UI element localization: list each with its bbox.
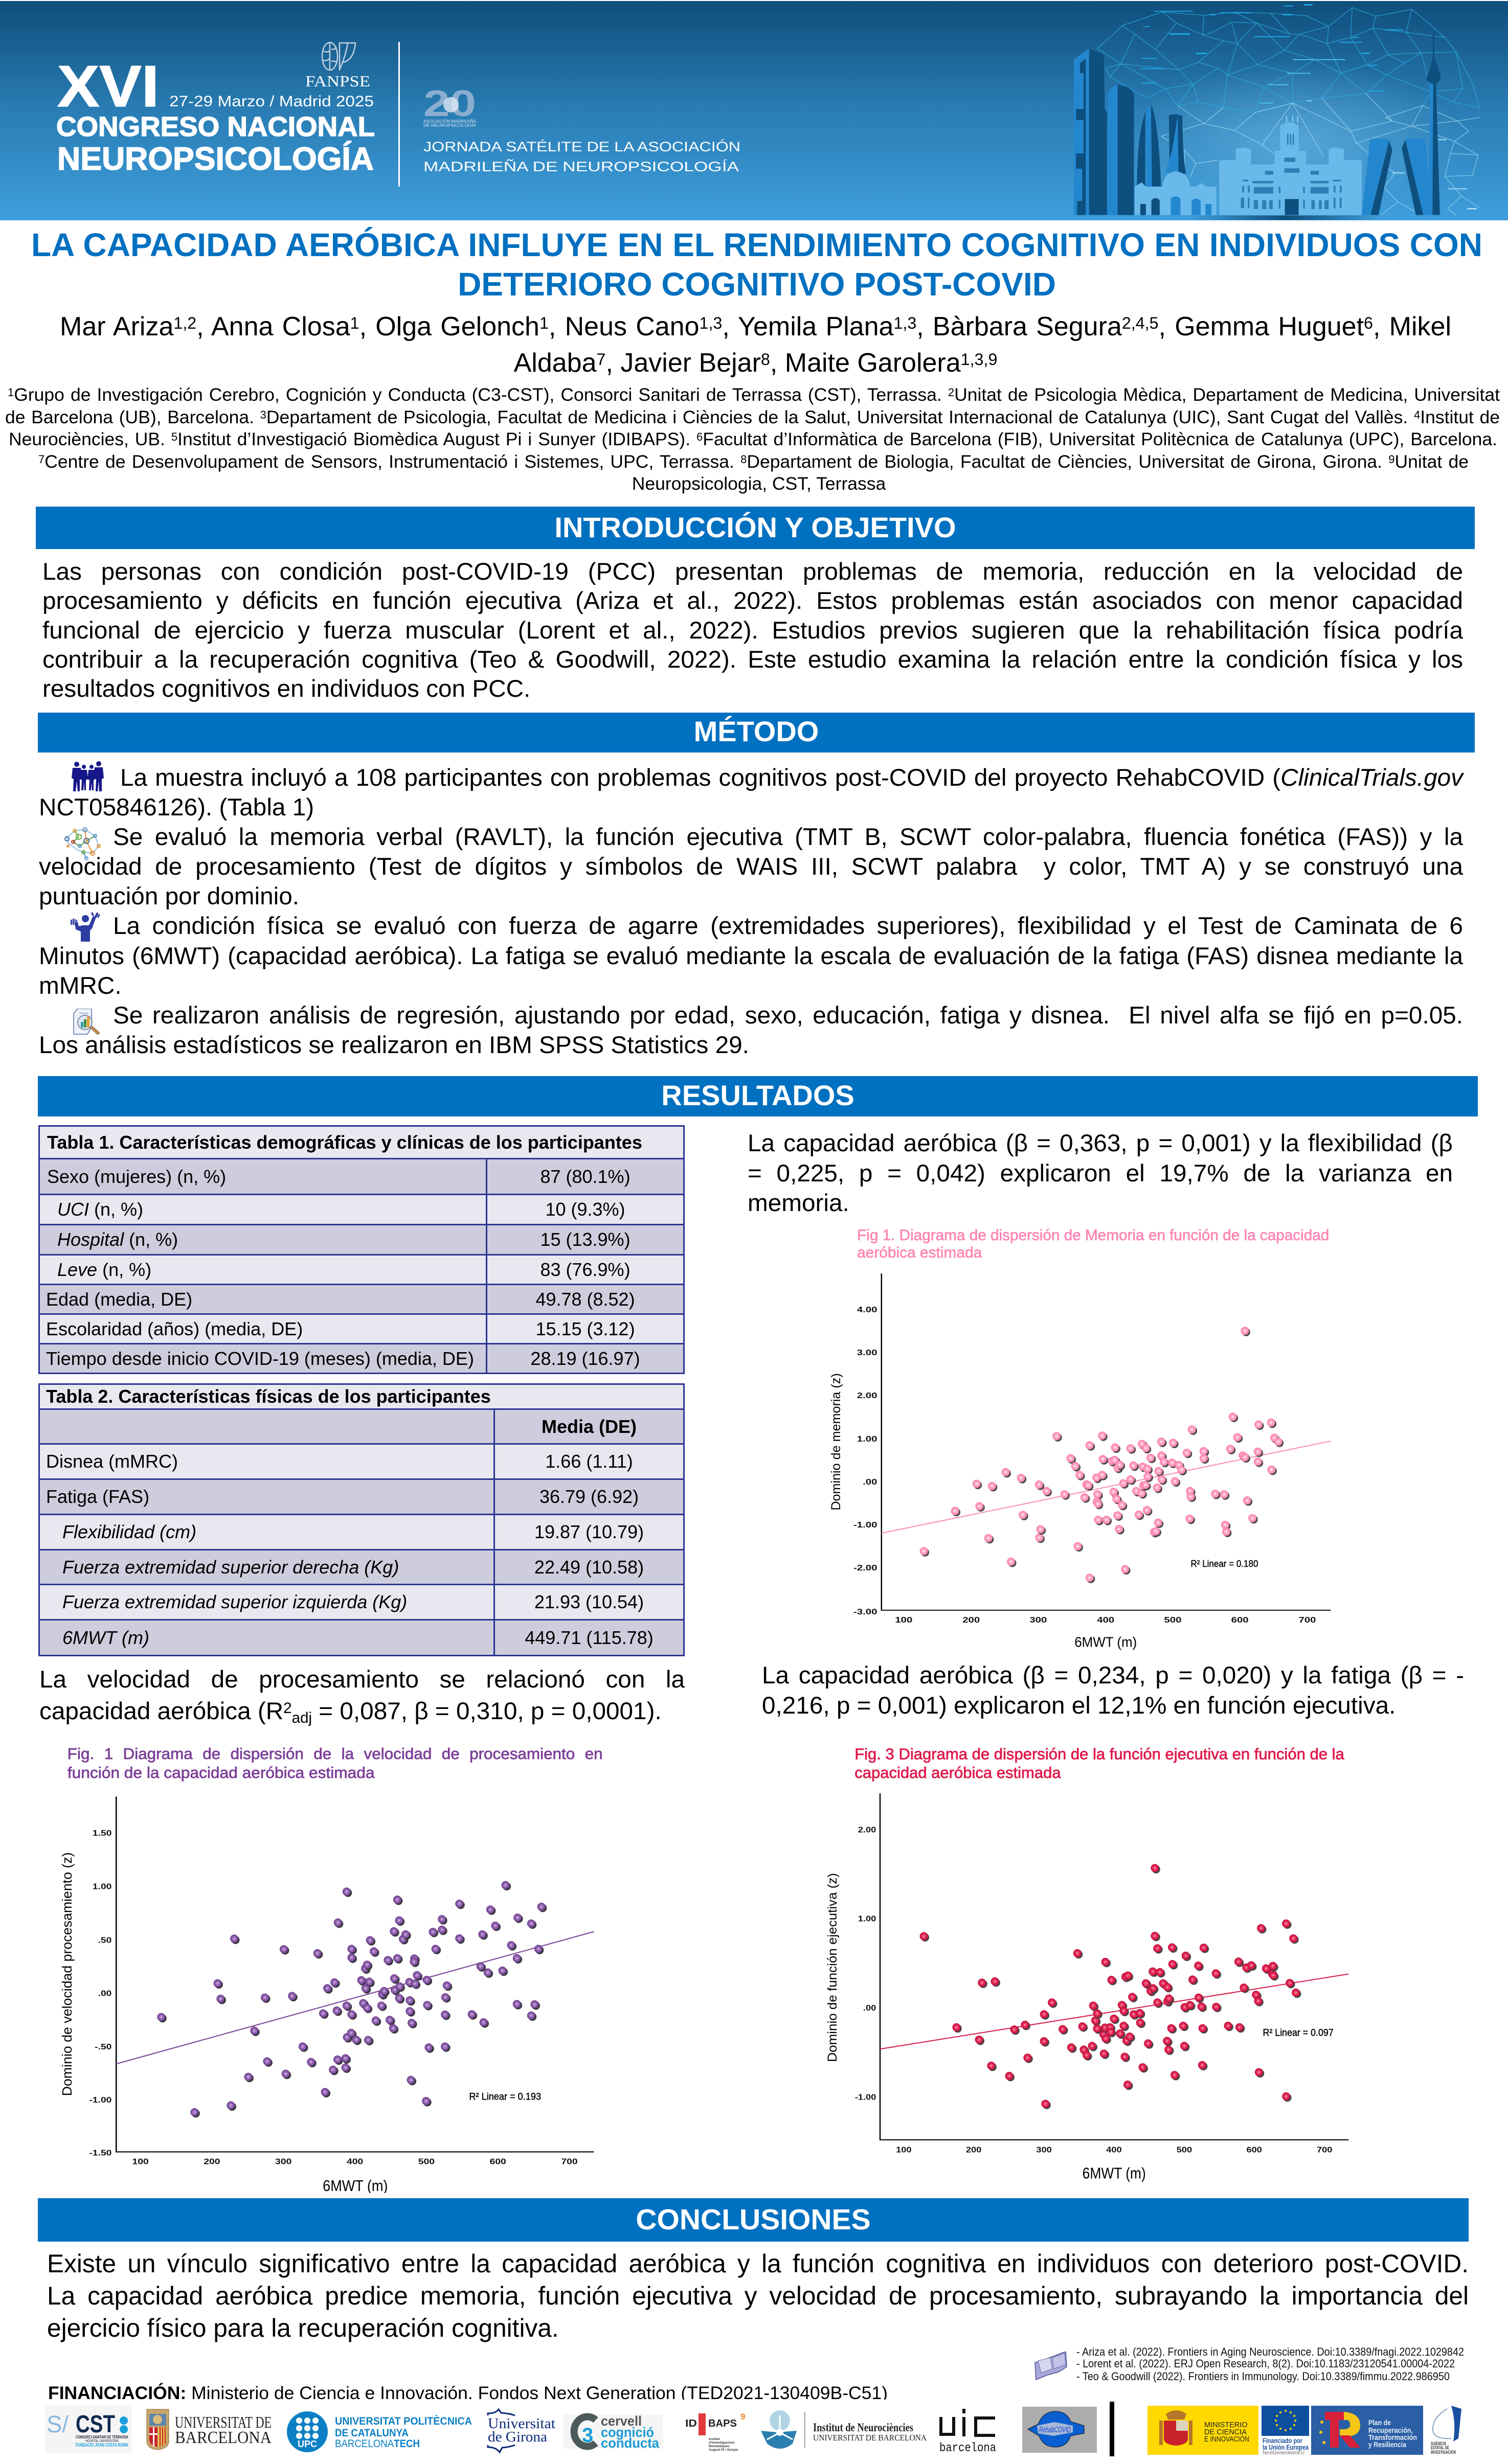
chart title <box>854 1745 1345 1781</box>
title <box>31 226 1482 303</box>
x axis title: 6MWT (m) <box>1083 2164 1146 2182</box>
affiliations: 1Grupo de Investigación Cerebro, Cognición y Conducta (C3-CST), Consorci Sanitari de Terrassa (CST), Terrassa. 2Unitat de Psicologia Mèdica, Departament de Medicina, Universitat <box>8 384 1500 405</box>
scatter points <box>920 1864 1301 2109</box>
icon: statistics report <box>73 1009 100 1035</box>
axes <box>882 1273 1331 1610</box>
icon: 20th anniversary logo: DE NEUROPSICOLOGÍA <box>423 123 477 128</box>
title: LA CAPACIDAD AERÓBICA INFLUYE EN EL RENDIMIENTO COGNITIVO EN INDIVIDUOS CON <box>31 226 1482 263</box>
heading: conclusions <box>38 2198 1469 2242</box>
y axis title: Dominio de memoria (z) <box>829 1373 843 1511</box>
affiliations: Neuropsicologia, CST, Terrassa <box>632 473 886 494</box>
row: hospital: 15 (13.9%) <box>540 1229 631 1250</box>
heading: method: MÉTODO <box>694 715 819 747</box>
satellite session line 1: JORNADA SATÉLITE DE LA ASOCIACIÓN <box>423 139 740 154</box>
table 1: demographic characteristics <box>38 1125 685 1374</box>
logo: Plan de Recuperación: Transformación <box>1368 2433 1417 2442</box>
illustration: Madrid skyline with neural mesh <box>1074 4 1479 221</box>
axes <box>116 1796 594 2152</box>
icon: brain network <box>64 827 101 860</box>
row: hospital <box>40 1225 683 1254</box>
x axis ticks: 200 <box>962 1615 980 1625</box>
chart: executive function scatter <box>808 1733 1370 2193</box>
x axis ticks: 500 <box>1164 1615 1181 1625</box>
x axis ticks: 200 <box>966 2146 981 2154</box>
logo: IDIBAPS: BAPS <box>708 2418 737 2429</box>
axes <box>880 1793 1348 2140</box>
chart title <box>67 1745 603 1782</box>
y axis ticks <box>853 1305 877 1616</box>
row: left grip: 21.93 (10.54) <box>534 1591 644 1612</box>
trend line <box>880 1974 1348 2049</box>
heading: introduction: INTRODUCCIÓN Y OBJETIVO <box>554 511 956 543</box>
logo: Ministerio de Ciencia e Innovación <box>1147 2406 1258 2455</box>
y axis ticks: -.50 <box>95 2042 112 2051</box>
text block: method: Minutos (6MWT) (capacidad aeróbica). La fatiga se evaluó mediante la escala de evaluación de la fatiga (FAS) disnea mediante la <box>39 943 1463 970</box>
text block: conclusions <box>47 2248 1469 2344</box>
text block: memory result: = 0,225, p = 0,042) explicaron el 19,7% de la varianza en <box>748 1159 1453 1187</box>
row: mild <box>40 1256 683 1284</box>
logo: RehabCOVID project <box>1022 2407 1097 2453</box>
y axis ticks: 3.00 <box>857 1348 877 1357</box>
row: mild: 83 (76.9%) <box>540 1259 631 1280</box>
logo: Universitat de Barcelona: BARCELONA <box>175 2428 272 2447</box>
logo: UIC Barcelona: barcelona <box>939 2442 996 2455</box>
divider <box>398 42 400 187</box>
text block: method: La condición física se evaluó con fuerza de agarre (extremidades superiores), flexibilidad y el Test de Caminata de 6 <box>113 912 1463 940</box>
x axis ticks: 700 <box>1317 2146 1332 2154</box>
logo: Ministerio de Ciencia e Innovación: DE CIENCIA <box>1204 2428 1247 2436</box>
logo: CST: HOSPITAL UNIVERSITARI <box>85 2439 119 2443</box>
logo: Agencia Estatal de Investigación: AGENCIA <box>1431 2441 1446 2446</box>
y axis ticks: -1.00 <box>89 2095 112 2105</box>
logo: European Union Next Generation <box>1262 2406 1309 2456</box>
logo: CST: FUNDACIÓ JOAN COSTA ROMA <box>76 2442 128 2448</box>
x axis ticks <box>132 2157 578 2166</box>
text block: memory result: memoria. <box>748 1190 849 1217</box>
text block: conclusions: La capacidad aeróbica predice memoria, función ejecutiva y velocidad de procesamiento, subrayando la importancia del <box>47 2282 1469 2310</box>
row: hospital: Hospital (n, %) <box>57 1229 178 1250</box>
row: schooling <box>40 1315 683 1343</box>
logo: UPC: UNIVERSITAT POLITÈCNICA <box>335 2415 472 2427</box>
row: fatigue: Fatiga (FAS) <box>46 1486 149 1507</box>
text block: processing speed result <box>39 1664 685 1727</box>
text block: memory result: La capacidad aeróbica (β = 0,363, p = 0,001) y la flexibilidad (β <box>748 1130 1453 1157</box>
logo: Agencia Estatal de Investigación: ESTATAL DE <box>1431 2445 1449 2450</box>
row: left grip <box>39 1585 684 1619</box>
row: ICU: 10 (9.3%) <box>545 1199 625 1220</box>
table 2 title: Tabla 2. Características físicas de los participantes <box>46 1386 491 1407</box>
logo: C3 cervell cognició conducta <box>564 2413 663 2451</box>
R squared annotation: R² Linear = 0.193 <box>469 2091 541 2102</box>
chart title: capacidad aeróbica estimada <box>854 1764 1061 1781</box>
text block: conclusions: Existe un vínculo significativo entre la capacidad aeróbica y la función cognitiva en individuos con deterioro post-COVID. <box>47 2249 1469 2278</box>
x axis ticks <box>895 1615 1316 1625</box>
panel: introduction <box>36 507 1475 702</box>
row: dyspnea: 1.66 (1.11) <box>545 1451 633 1472</box>
y axis ticks: 1.50 <box>93 1829 112 1838</box>
x axis ticks: 100 <box>132 2157 149 2166</box>
divider bar <box>1110 2402 1114 2456</box>
text block: method: Los análisis estadísticos se realizaron en IBM SPSS Statistics 29. <box>39 1032 749 1059</box>
text block: method: velocidad de procesamiento (Test de dígitos y símbolos de WAIS III, SCWT palabra y color, TMT A) y se construyó una <box>39 853 1463 880</box>
icon: open book <box>1034 2352 1068 2380</box>
icon: FANPSE logo <box>322 42 355 71</box>
Torrespaña spire <box>1428 83 1433 215</box>
text block: introduction: resultados cognitivos en individuos con PCC. <box>42 675 530 702</box>
row: age <box>40 1285 683 1313</box>
y axis ticks: -3.00 <box>853 1607 877 1616</box>
logo: Plan de Recuperación: y Resiliencia <box>1368 2440 1407 2449</box>
x axis ticks: 100 <box>896 2146 912 2154</box>
row: 6MWT: 449.71 (115.78) <box>525 1627 654 1648</box>
text block: introduction: contribuir a la recuperación cognitiva (Teo & Goodwill, 2022). Este estudio examina la relación entre la condición física y los <box>42 646 1463 673</box>
logo: Universitat de Barcelona <box>147 2409 272 2450</box>
text block: processing speed result: capacidad aeróbica (R2adj = 0,087, β = 0,310, p = 0,0001). <box>39 1698 662 1726</box>
logo strip <box>0 2400 1508 2464</box>
row: schooling: 15.15 (3.12) <box>535 1318 635 1339</box>
logo: C3 cervell cognició conducta: cervell <box>601 2413 642 2429</box>
panel: results heading: RESULTADOS <box>661 1079 854 1111</box>
Cibeles palace <box>1219 122 1362 215</box>
R squared annotation: R² Linear = 0.180 <box>1191 1559 1258 1569</box>
logo: IDIBAPS: 9 <box>740 2412 745 2422</box>
y axis ticks <box>89 1829 112 2157</box>
row: left grip: Fuerza extremidad superior izquierda (Kg) <box>62 1591 407 1612</box>
logo: IDIBAPS: August Pi i Sunyer <box>709 2448 738 2452</box>
y axis ticks: 4.00 <box>857 1305 877 1314</box>
row: sex: Sexo (mujeres) (n, %) <box>47 1166 226 1187</box>
authors: Mar Ariza1,2, Anna Closa1, Olga Gelonch1, Neus Cano1,3, Yemila Plana1,3, Bàrbara Segura2,4,5, Gemma Huguet6, Mikel <box>60 312 1451 341</box>
y axis ticks: -1.00 <box>855 2093 876 2102</box>
logo: IDIBAPS: Institut <box>709 2437 720 2441</box>
logo: European Union Next Generation: la Unión Europea <box>1263 2443 1309 2451</box>
table 1 title <box>40 1127 683 1373</box>
affiliations: 7Centre de Desenvolupament de Sensors, Instrumentació i Sistemes, UPC, Terrassa. 8Departament de Biologia, Facultat de Ciències, Universitat de Girona, Girona. 9Unitat de <box>38 451 1469 472</box>
logo: Agencia Estatal de Investigación: INVESTIGACIÓN <box>1431 2449 1456 2455</box>
spires <box>1137 104 1161 187</box>
x axis ticks: 500 <box>418 2157 435 2166</box>
icon: 20th anniversary logo: 20 <box>423 83 476 124</box>
trend line <box>116 1931 594 2064</box>
congress name line 2: NEUROPSICOLOGÍA <box>57 141 374 177</box>
y axis ticks: .00 <box>863 1477 877 1487</box>
y axis ticks: -2.00 <box>853 1563 877 1572</box>
table 2 title <box>39 1384 684 1655</box>
row: flexibility: Flexibilidad (cm) <box>62 1521 196 1542</box>
x axis ticks <box>896 2146 1332 2154</box>
row: column header: Media (DE) <box>542 1416 637 1436</box>
trend line <box>882 1441 1331 1533</box>
chart title: función de la capacidad aeróbica estimada <box>67 1764 375 1782</box>
scatter points <box>920 1327 1284 1583</box>
logo: C3 cervell cognició conducta: cognició <box>601 2425 654 2440</box>
FANPSE wordmark: FANPSE <box>305 72 370 90</box>
text block: memory result <box>748 1129 1453 1219</box>
text block: method: Se realizaron análisis de regresión, ajustando por edad, sexo, educación, fatiga y disnea. El nivel alfa se fijó en p=0.05. <box>113 1002 1463 1029</box>
logo: Universitat de Barcelona: UNIVERSITAT DE <box>175 2413 272 2431</box>
logo: Plan de Recuperación: Plan de <box>1368 2419 1391 2427</box>
y axis ticks <box>855 1826 876 2102</box>
y axis ticks: .00 <box>863 2003 876 2013</box>
heading: introduction <box>36 507 1475 549</box>
text block: method: NCT05846126). (Tabla 1) <box>39 794 314 821</box>
icon: 20th anniversary logo: ASOCIACIÓN MADRILEÑA <box>423 119 477 124</box>
row: time since COVID <box>40 1344 683 1373</box>
row: right grip: 22.49 (10.58) <box>534 1556 644 1578</box>
logo: European Union Next Generation: NextGenerationEU <box>1263 2450 1304 2456</box>
y axis ticks: 1.00 <box>858 1914 876 1923</box>
logo: IDIBAPS: ID <box>685 2418 697 2429</box>
chart: memory scatter <box>808 1217 1370 1651</box>
logo: IDIBAPS: d'Investigacions <box>709 2441 735 2445</box>
congress name line 1: CONGRESO NACIONAL <box>56 111 375 142</box>
left building <box>1135 171 1217 215</box>
Puerta de Europa towers <box>1362 139 1431 215</box>
affiliations: de Barcelona (UB), Barcelona. 3Departament de Psicologia, Facultat de Medicina i Ciències de la Salut, Universitat Internacional de Catalunya (UIC), Sant Cugat del Vallès. 4Institut de <box>5 407 1500 427</box>
row: ICU <box>40 1195 683 1224</box>
y axis ticks: -1.50 <box>89 2148 112 2157</box>
logo: UPC <box>287 2411 472 2452</box>
row: time since COVID: 28.19 (16.97) <box>530 1348 640 1369</box>
logo: UPC: BARCELONATECH <box>335 2438 420 2450</box>
affiliations <box>5 384 1500 494</box>
text block: method: mMRC. <box>39 972 122 999</box>
chart title <box>857 1227 1329 1261</box>
row: sex: 87 (80.1%) <box>540 1166 631 1187</box>
icon: weightlifter <box>71 912 100 942</box>
x axis ticks: 600 <box>1231 1615 1249 1625</box>
x axis ticks: 300 <box>1036 2146 1052 2154</box>
references <box>1074 2344 1473 2384</box>
row: age: 49.78 (8.52) <box>535 1288 635 1310</box>
row: schooling: Escolaridad (años) (media, DE) <box>46 1318 303 1339</box>
text block: method: Se evaluó la memoria verbal (RAVLT), la función ejecutiva (TMT B, SCWT color-palabra, fluencia fonética (FAS)) y la <box>113 824 1463 851</box>
y axis ticks: 2.00 <box>858 1826 876 1834</box>
text block: introduction: procesamiento y déficits en función ejecutiva (Ariza et al., 2022). Estos problemas están asociados con menor capacidad <box>42 587 1463 614</box>
authors: Aldaba7, Javier Bejar8, Maite Garolera1,3,9 <box>514 348 997 378</box>
logo: Plan de Recuperación <box>1311 2406 1423 2455</box>
logo: Universitat de Girona: Universitat <box>488 2415 555 2432</box>
logo: Universitat de Girona: de Girona <box>488 2429 547 2445</box>
logo: C3 cervell cognició conducta: conducta <box>601 2435 660 2451</box>
icon: participants group <box>72 761 104 791</box>
logo: CST: CST <box>76 2411 115 2438</box>
y axis ticks: .00 <box>98 1989 112 1998</box>
y axis ticks: 2.00 <box>857 1391 877 1400</box>
y axis ticks: .50 <box>98 1935 112 1945</box>
row: time since COVID: Tiempo desde inicio COVID-19 (meses) (media, DE) <box>46 1348 474 1369</box>
x axis ticks: 600 <box>1246 2146 1262 2154</box>
row: ICU: UCI (n, %) <box>57 1199 143 1220</box>
x axis ticks: 600 <box>490 2157 506 2166</box>
logo: Institut de Neurociències <box>761 2410 927 2449</box>
row: sex <box>40 1159 683 1194</box>
row: right grip: Fuerza extremidad superior derecha (Kg) <box>62 1556 399 1578</box>
x axis ticks: 300 <box>275 2157 292 2166</box>
table 2: physical characteristics <box>38 1383 685 1656</box>
logo: UPC: UPC <box>298 2439 317 2449</box>
R squared annotation: R² Linear = 0.097 <box>1263 2027 1334 2038</box>
logo: Ministerio de Ciencia e Innovación: E INNOVACIÓN <box>1204 2435 1249 2444</box>
logo: RehabCOVID project: RehabCOVID <box>1039 2426 1071 2434</box>
logo: Institut de Neurociències: Institut de Neurociències <box>813 2421 913 2434</box>
logo: UIC Barcelona <box>939 2409 996 2455</box>
logo: Plan de Recuperación: Recuperación, <box>1368 2426 1413 2435</box>
text block: executive function result: La capacidad aeróbica (β = 0,234, p = 0,020) y la fatiga (β = - <box>762 1662 1464 1689</box>
title: DETERIORO COGNITIVO POST-COVID <box>458 266 1056 303</box>
x axis ticks: 700 <box>1299 1615 1316 1625</box>
logo: CST: CONSORCI SANITARI DE TERRASSA <box>76 2435 128 2439</box>
row: right grip <box>39 1550 684 1585</box>
logo: C3 cervell cognició conducta: 3 <box>582 2424 593 2447</box>
logo: Ministerio de Ciencia e Innovación: MINISTERIO <box>1204 2421 1248 2429</box>
row: dyspnea: Disnea (mMRC) <box>46 1451 178 1472</box>
x axis ticks: 400 <box>347 2157 363 2166</box>
affiliations: Neurociències, UB. 5Institut d’Investigació Biomèdica August Pi i Sunyer (IDIBAPS). 6Facultat d’Informàtica de Barcelona (FIB), Universitat Politècnica de Catalunya (UPC), Barcelona. <box>9 429 1497 449</box>
y axis title: Dominio de función ejecutiva (z) <box>825 1873 839 2062</box>
row: fatigue <box>39 1479 684 1514</box>
row: fatigue: 36.79 (6.92) <box>539 1486 639 1507</box>
text block: executive function result <box>762 1660 1464 1721</box>
row: flexibility: 19.87 (10.79) <box>534 1521 644 1542</box>
panel: method <box>38 713 1475 1059</box>
row: 6MWT <box>39 1619 684 1655</box>
text block: introduction: Las personas con condición post-COVID-19 (PCC) presentan problemas de memoria, reducción en la velocidad de <box>42 558 1463 585</box>
panel: results heading <box>38 1076 1478 1116</box>
x axis ticks: 700 <box>561 2157 578 2166</box>
chart title: aeróbica estimada <box>857 1244 982 1261</box>
text block: executive function result: 0,216, p = 0,001) explicaron el 12,1% en función ejecutiva. <box>762 1692 1396 1719</box>
congress title: XVI: XVI <box>57 54 159 119</box>
logo: CST: S/ <box>47 2411 69 2437</box>
logo: IDIBAPS <box>685 2412 745 2452</box>
logo: Institut de Neurociències: UNIVERSITAT DE BARCELONA <box>813 2433 927 2443</box>
x axis ticks: 400 <box>1106 2146 1122 2154</box>
authors <box>60 312 1451 378</box>
chart: processing speed scatter <box>51 1733 644 2193</box>
heading: method <box>38 713 1475 752</box>
text block: processing speed result: La velocidad de procesamiento se relacionó con la <box>39 1666 685 1693</box>
x axis title: 6MWT (m) <box>1074 1633 1137 1650</box>
row: flexibility <box>39 1514 684 1550</box>
row: dyspnea <box>39 1444 684 1479</box>
congress dates: 27-29 Marzo / Madrid 2025 <box>169 93 374 110</box>
scatter points <box>157 1881 547 2117</box>
satellite session line 2: MADRILEÑA DE NEUROPSICOLOGÍA <box>423 158 739 174</box>
tower A <box>1074 49 1108 215</box>
header banner <box>0 1 1508 220</box>
logo: UPC: DE CATALUNYA <box>335 2427 409 2439</box>
x axis ticks: 400 <box>1097 1615 1114 1625</box>
text block: method: puntuación por dominio. <box>39 883 299 910</box>
heading: conclusions: CONCLUSIONES <box>636 2203 871 2236</box>
y axis ticks: -1.00 <box>853 1520 877 1530</box>
y axis ticks: 1.00 <box>93 1882 112 1891</box>
y axis title: Dominio de velocidad procesamiento (z) <box>60 1852 75 2096</box>
text block: method: La muestra incluyó a 108 participantes con problemas cognitivos post-COVID del proyecto RehabCOVID (ClinicalTrials.gov <box>120 764 1463 791</box>
row: column header <box>39 1409 684 1444</box>
row: 6MWT: 6MWT (m) <box>62 1627 149 1648</box>
x axis ticks: 500 <box>1177 2146 1192 2154</box>
table 1 title: Tabla 1. Características demográficas y clínicas de los participantes <box>47 1132 642 1152</box>
logo: CST <box>45 2406 132 2453</box>
text block: introduction: funcional de ejercicio y fuerza muscular (Lorent et al., 2022). Estudios previos sugieren que la rehabilitación física podría <box>42 617 1463 644</box>
x axis ticks: 300 <box>1029 1615 1047 1625</box>
text block: conclusions: ejercicio físico para la recuperación cognitiva. <box>47 2314 559 2342</box>
row: mild: Leve (n, %) <box>57 1259 151 1280</box>
row: age: Edad (media, DE) <box>46 1288 192 1310</box>
x axis ticks: 100 <box>895 1615 912 1625</box>
logo: Universitat de Girona <box>488 2409 555 2452</box>
y axis ticks: 1.00 <box>857 1434 877 1444</box>
text block: method <box>39 764 1465 1059</box>
tower B <box>1108 84 1134 215</box>
panel: conclusions <box>38 2198 1475 2346</box>
logo: European Union Next Generation: Financiado por <box>1263 2436 1302 2445</box>
logo: IDIBAPS: Biomèdiques <box>709 2445 730 2448</box>
text block: introduction <box>42 558 1464 702</box>
x axis ticks: 200 <box>204 2157 220 2166</box>
logo: Agencia Estatal de Investigación <box>1431 2406 1461 2455</box>
